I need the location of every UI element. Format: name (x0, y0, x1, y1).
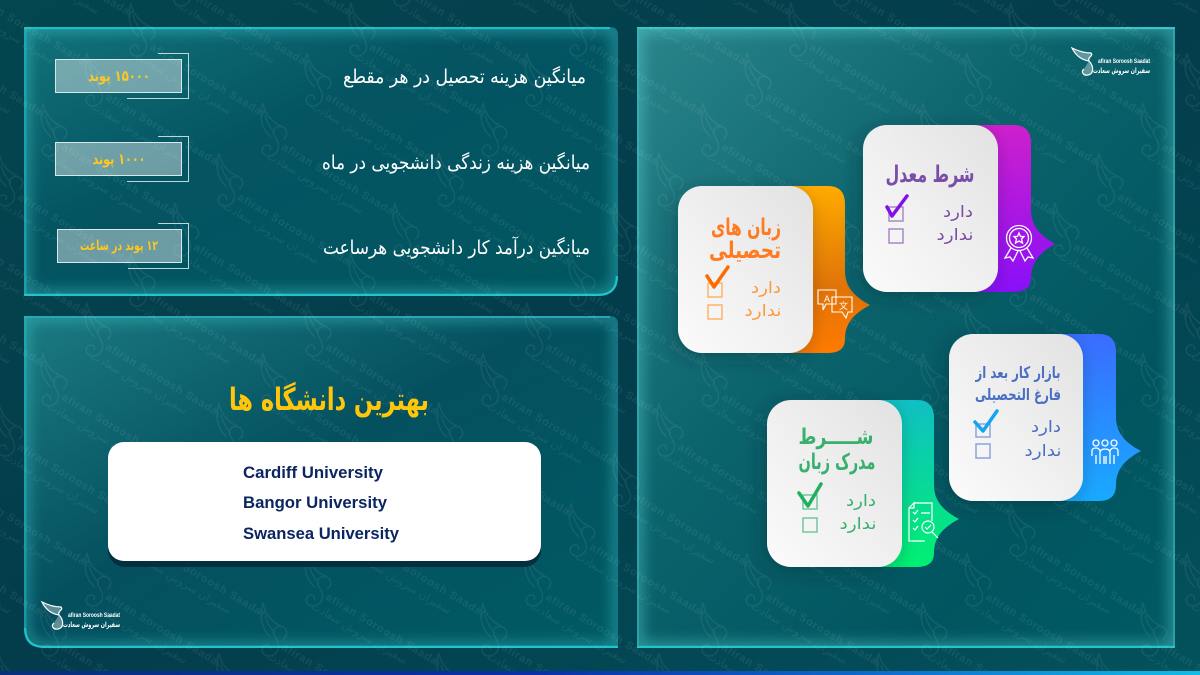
green title (798, 425, 876, 475)
green title: شـــــرط (798, 425, 874, 450)
purple arrow tab (953, 125, 1055, 292)
icon: document with magnifier (909, 503, 938, 541)
logo top right: سفیران سروش سعادت (1093, 66, 1150, 75)
living cost value box (56, 136, 188, 182)
living cost value box: ۱۰۰۰ پوند (92, 150, 146, 169)
icon: translation bubbles: 文 (839, 300, 848, 311)
green arrow tab (857, 400, 959, 567)
icon: award ribbon (1005, 226, 1033, 261)
purple title: شرط معدل (886, 162, 974, 188)
purple checkboxes (889, 207, 903, 243)
green title: مدرک زبان (798, 450, 876, 475)
icon: translation bubbles (818, 290, 852, 318)
card: job market (blue) (949, 334, 1141, 501)
green white card (767, 400, 902, 567)
green checkboxes (803, 495, 817, 532)
purple options (936, 202, 974, 245)
blue checkboxes (976, 424, 990, 458)
card: language certificate (green) (767, 400, 959, 567)
heading: best universities: بهترین دانشگاه ها (229, 381, 429, 418)
student income value box: ۱۲ پوند در ساعت (80, 238, 159, 254)
orange title: زبان های (711, 215, 781, 241)
university list card (108, 442, 541, 567)
panel: best universities background (24, 316, 618, 648)
blue white card (949, 334, 1083, 501)
orange options (744, 278, 782, 321)
orange options: ندارد (744, 301, 782, 321)
purple options: دارد (943, 202, 973, 222)
orange check mark (707, 267, 728, 287)
blue arrow tab (1039, 334, 1141, 501)
blue options: دارد (1031, 417, 1061, 437)
tuition value box (56, 54, 188, 98)
panel: costs background (24, 27, 618, 296)
blue options: ندارد (1024, 441, 1062, 461)
student income label: میانگین درآمد کار دانشجویی هرساعت (323, 235, 590, 259)
blue options (1024, 417, 1062, 461)
university names: Cardiff University (243, 464, 384, 482)
purple check mark (887, 196, 907, 216)
orange white card (678, 186, 813, 353)
orange title (709, 215, 781, 264)
blue title: بازار کار بعد از (975, 363, 1061, 382)
logo bottom left: afiran Soroosh Saadat (68, 612, 121, 619)
tuition label: میانگین هزینه تحصیل در هر مقطع (343, 65, 586, 88)
orange options: دارد (751, 278, 781, 298)
green options: ندارد (840, 514, 876, 534)
cost row: income (58, 224, 590, 268)
cost row: living (56, 136, 590, 182)
icon: people group (1092, 440, 1118, 464)
green options: دارد (846, 491, 876, 511)
green options (840, 491, 876, 534)
university names: Bangor University (243, 494, 388, 512)
logo top right: afiran Soroosh Saadat (1098, 58, 1151, 65)
student income value box (58, 224, 188, 268)
logo bottom left: سفیران سروش سعادت (63, 620, 120, 629)
purple white card (863, 125, 998, 292)
green check mark (799, 484, 821, 506)
panel: requirements background (637, 27, 1175, 648)
tuition value box: ۱۵۰۰۰ پوند (88, 67, 150, 86)
living cost label: میانگین هزینه زندگی دانشجویی در ماه (322, 151, 590, 174)
blue title (975, 363, 1061, 404)
orange arrow tab (768, 186, 870, 353)
card: academic languages (orange) (678, 186, 870, 353)
card: GPA requirement (purple) (863, 125, 1055, 292)
purple options: ندارد (936, 225, 974, 245)
icon: translation bubbles: A (824, 294, 830, 304)
logo bottom left (42, 602, 121, 629)
blue check mark (975, 411, 997, 431)
orange checkboxes (708, 283, 722, 319)
university names: Swansea University (243, 525, 400, 543)
university names (243, 464, 400, 543)
blue title: فارغ التحصیلی (975, 385, 1061, 404)
bottom colour strip (0, 671, 1200, 675)
cost row: tuition (56, 54, 586, 98)
logo top right (1072, 48, 1151, 75)
orange title: تحصیلی (709, 238, 781, 264)
